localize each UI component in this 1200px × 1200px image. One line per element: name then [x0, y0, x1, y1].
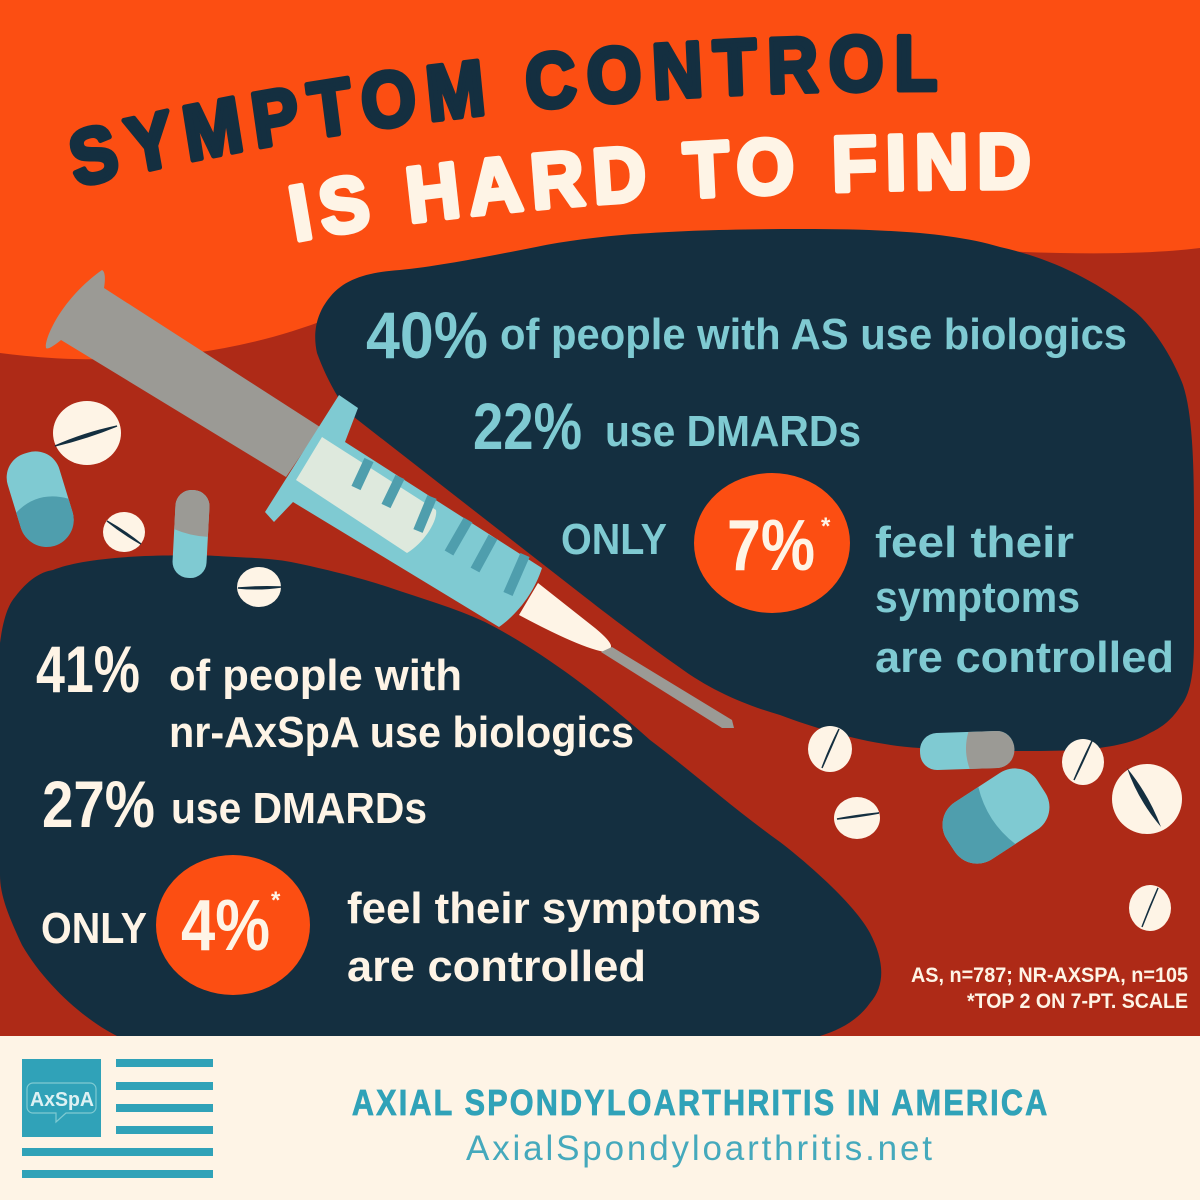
text: feel their symptoms are controlled: feel their symptoms — [347, 884, 761, 933]
round pill — [1062, 739, 1104, 785]
stat: 22 percent DMARDs: use DMARDs — [605, 407, 861, 456]
icon: pills left — [0, 401, 281, 607]
callout: 4 percent circle — [156, 855, 310, 995]
callout: 7 percent circle: 7% — [727, 506, 815, 586]
footer heading: AXIAL SPONDYLOARTHRITIS IN AMERICA — [352, 1084, 1047, 1124]
syringe plunger — [46, 270, 320, 477]
stat: 41 percent biologics: nr-AxSpA use biologics — [169, 708, 634, 757]
logo: AxSpA flag — [22, 1059, 213, 1178]
stat: 22 percent DMARDs — [473, 389, 861, 463]
background: red wave — [0, 239, 1200, 1040]
round pill — [1129, 885, 1171, 931]
vertical capsule — [172, 489, 210, 579]
callout: 4 percent circle: 4% — [181, 886, 270, 966]
syringe liquid window — [296, 437, 436, 553]
stat: 27 percent DMARDs: 27% — [42, 767, 155, 841]
capsule — [0, 445, 80, 554]
callout: 7 percent circle: * — [821, 513, 831, 540]
text: feel their symptoms are controlled — [875, 518, 1174, 682]
syringe needle hub — [519, 583, 611, 652]
large capsule — [932, 758, 1060, 874]
text: feel their symptoms are controlled: are controlled — [875, 633, 1174, 682]
footnote: *TOP 2 ON 7-PT. SCALE — [967, 990, 1188, 1013]
syringe needle — [601, 647, 734, 728]
logo: AxSpA flag: AxSpA — [30, 1089, 94, 1111]
icon: pills right — [808, 726, 1182, 931]
footnote — [911, 964, 1188, 1013]
stat: 27 percent DMARDs: use DMARDs — [171, 784, 427, 833]
stat: 41 percent biologics: of people with — [169, 651, 462, 700]
text block: nr-AxSpA statistics — [36, 632, 761, 995]
horizontal capsule — [919, 730, 1015, 771]
callout: 4 percent circle: * — [271, 887, 281, 914]
round pill — [834, 797, 880, 839]
stat: 40 percent biologics: of people with AS use biologics — [500, 310, 1127, 359]
round pill — [808, 726, 852, 772]
syringe ticks — [356, 460, 525, 594]
label: only: ONLY — [41, 904, 147, 953]
stat: 40 percent biologics — [366, 298, 1127, 372]
icon: syringe — [46, 270, 734, 728]
round pill — [53, 401, 121, 465]
stat: 41 percent biologics: 41% — [36, 632, 140, 706]
title — [70, 34, 1030, 243]
text: feel their symptoms are controlled: feel their — [875, 518, 1074, 567]
text: feel their symptoms are controlled — [347, 884, 761, 991]
syringe barrel — [265, 395, 542, 627]
panel: nr-AxSpA statistics blob — [0, 555, 881, 1036]
text: feel their symptoms are controlled: are controlled — [347, 942, 646, 991]
callout: 7 percent circle — [694, 473, 850, 613]
stat: 40 percent biologics: 40% — [366, 298, 488, 372]
stat: 27 percent DMARDs — [42, 767, 427, 841]
small pill — [237, 567, 281, 607]
label: only: ONLY — [561, 515, 667, 564]
title: SYMPTOM CONTROL — [70, 34, 938, 186]
title: IS HARD TO FIND — [288, 132, 1030, 243]
stat: 41 percent biologics — [36, 632, 634, 757]
footer url: AxialSpondyloarthritis.net — [466, 1129, 932, 1168]
text: feel their symptoms are controlled: symptoms — [875, 573, 1080, 622]
large round pill — [1112, 764, 1182, 834]
footnote: AS, n=787; NR-AXSPA, n=105 — [911, 964, 1188, 987]
stat: 22 percent DMARDs: 22% — [473, 389, 582, 463]
panel: AS statistics blob — [315, 229, 1194, 751]
text block: AS statistics — [366, 298, 1174, 682]
small pill — [103, 512, 145, 552]
footer band — [0, 1036, 1200, 1200]
